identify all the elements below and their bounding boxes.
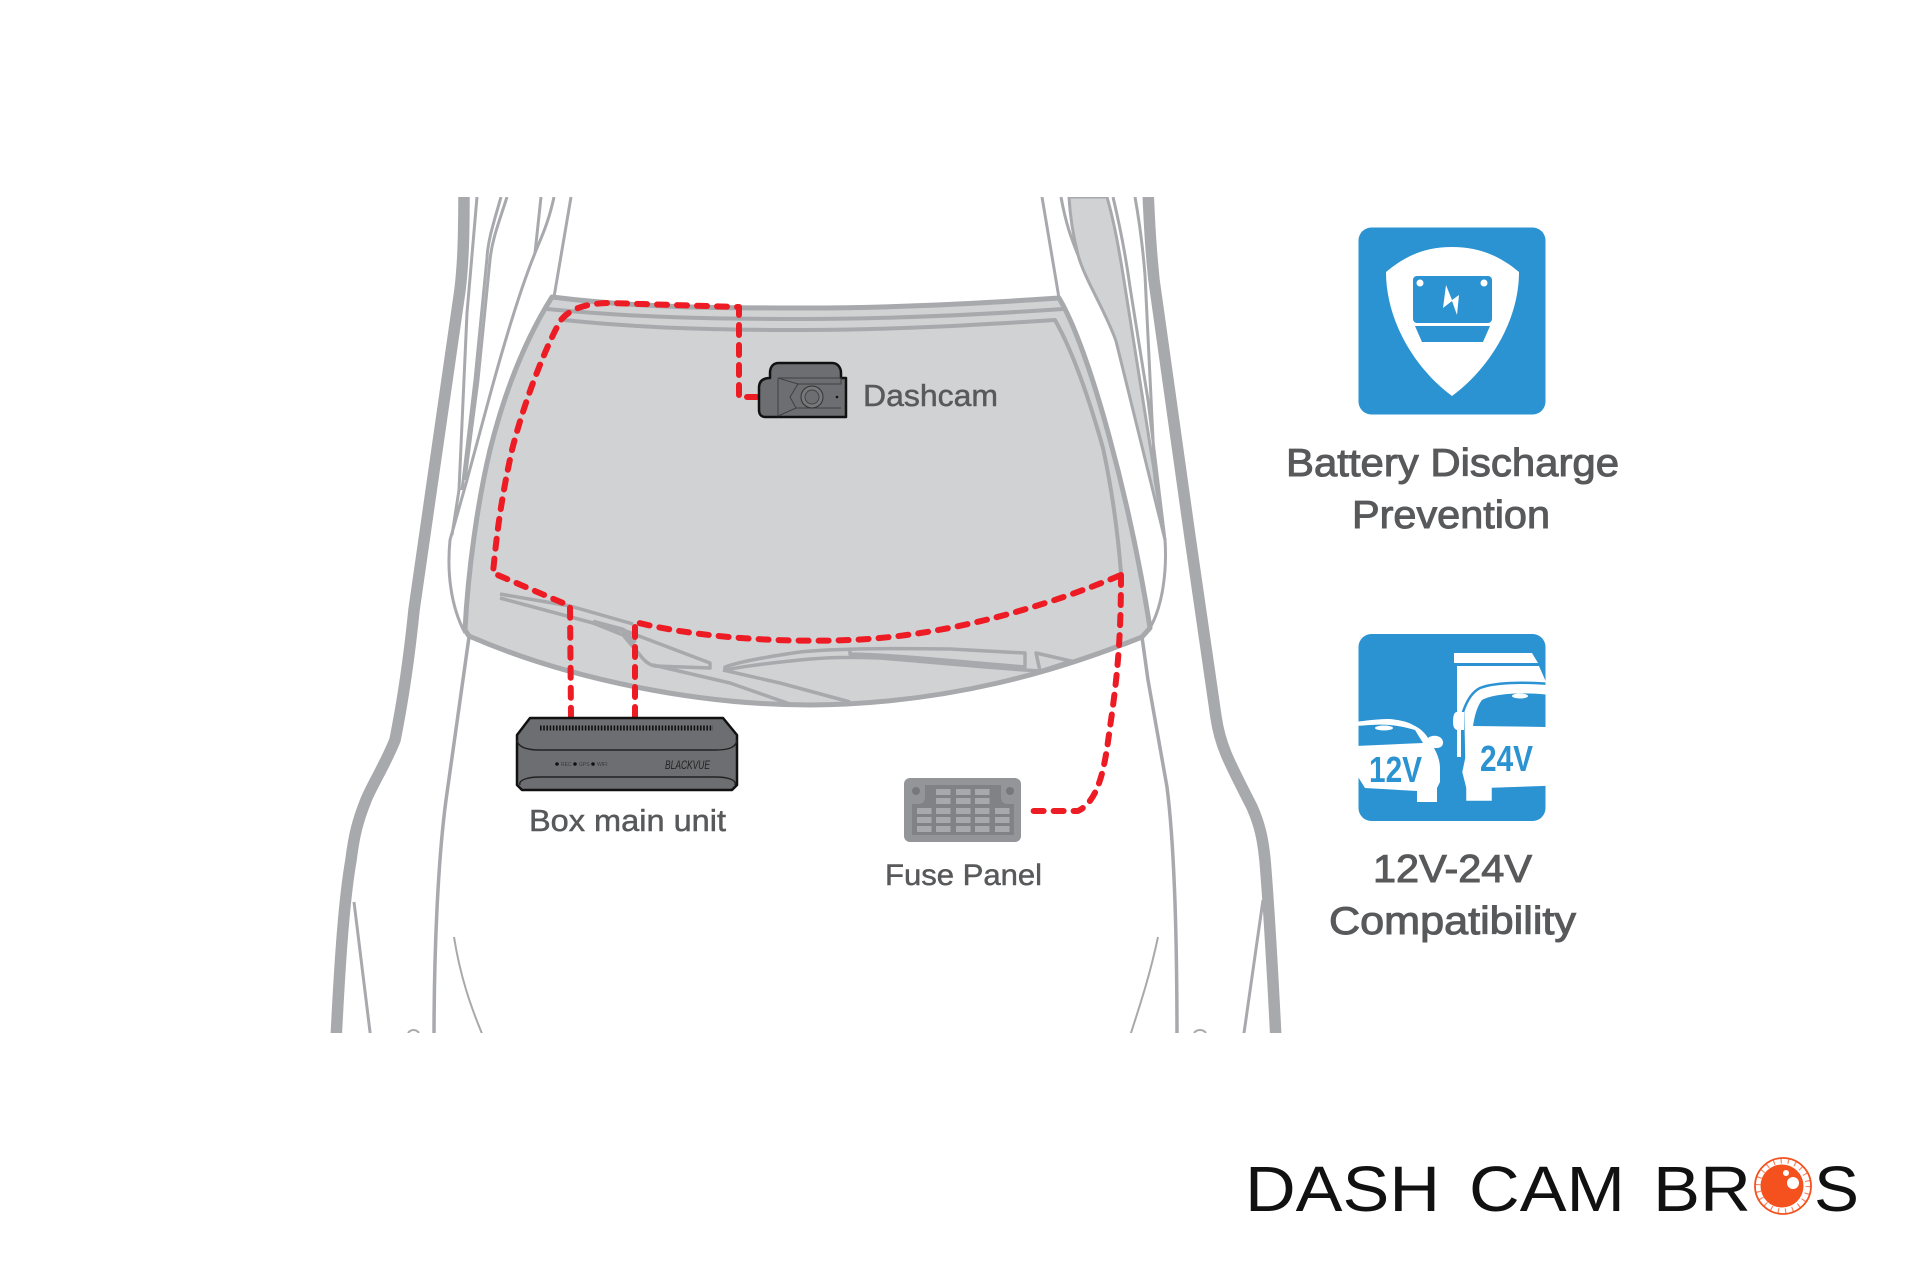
car dome light (1375, 726, 1393, 730)
truck cab (1461, 683, 1550, 802)
red dashed cable: dashcam to box via left edge (493, 303, 757, 717)
logo wordmark: BR (1653, 1153, 1751, 1225)
shield (1386, 247, 1519, 396)
red dashed cable: box across windshield base (635, 575, 1121, 717)
24V label: 24V (1480, 738, 1533, 779)
logo wordmark: CAM (1469, 1153, 1625, 1225)
heading: Battery Discharge Prevention: Prevention (1352, 494, 1550, 537)
outer car contour (336, 190, 464, 1040)
12V label: 12V (1369, 749, 1422, 790)
indicator captions: GPS (579, 762, 590, 768)
body side lines (434, 637, 1177, 1040)
windshield glass (465, 297, 1150, 705)
left wiper (500, 594, 710, 668)
icon: dashcam (759, 363, 846, 417)
heading: 12V-24V Compatibility: Compatibility (1329, 900, 1577, 943)
upper and lower body creases (517, 740, 737, 785)
heading: 12V-24V Compatibility (1329, 848, 1577, 943)
status lights (555, 762, 595, 766)
heading: Battery Discharge Prevention (1286, 442, 1619, 537)
heading: 12V-24V Compatibility: 12V-24V (1373, 848, 1532, 891)
indicator captions: REC (561, 762, 572, 768)
vent slots (540, 726, 713, 730)
label: Dashcam: Dashcam (863, 378, 998, 413)
lower accent lines (354, 900, 1263, 1040)
logo wordmark: O (1762, 1153, 1804, 1225)
wheel arc marks (408, 1030, 1206, 1033)
icon: 12V-24V vehicles (1355, 634, 1550, 821)
car body (1355, 719, 1443, 802)
icon: fuse panel (904, 778, 1021, 842)
logo eye (1754, 1157, 1812, 1215)
truck box (1454, 653, 1546, 712)
left door and mirror lines (449, 197, 571, 633)
logo wordmark: S (1814, 1153, 1859, 1225)
brand mark: BLACKVUE (665, 758, 711, 772)
indicator captions: WIFI (597, 762, 608, 768)
lightning bolt (1443, 285, 1459, 315)
logo wordmark (1245, 1153, 1859, 1225)
icon: box main unit (517, 718, 737, 790)
truck windshield (1473, 693, 1550, 727)
battery (1413, 276, 1492, 323)
windshield top trim lines (547, 309, 1121, 573)
car windshield (1355, 725, 1423, 746)
icon: battery discharge prevention (1358, 228, 1546, 414)
logo wordmark: DASH (1245, 1153, 1440, 1225)
infographic canvas (330, 197, 1856, 1215)
label: Box main unit: Box main unit (529, 803, 726, 838)
label: Fuse Panel: Fuse Panel (885, 859, 1042, 892)
right door and mirror lines (1042, 197, 1165, 628)
right wiper (725, 649, 1071, 671)
red dashed cable: windshield to fuse panel (1030, 575, 1121, 811)
heading: Battery Discharge Prevention: Battery Discharge (1286, 442, 1619, 485)
car outline illustration (336, 190, 1276, 1040)
right pillar fill (1069, 197, 1165, 540)
logo: Dash Cam Bros (1245, 1153, 1859, 1225)
truck mirror (1453, 712, 1464, 757)
fuse cells (917, 789, 1010, 832)
indicator captions (561, 762, 608, 768)
truck dome light (1512, 694, 1528, 698)
hood lines (653, 665, 850, 704)
